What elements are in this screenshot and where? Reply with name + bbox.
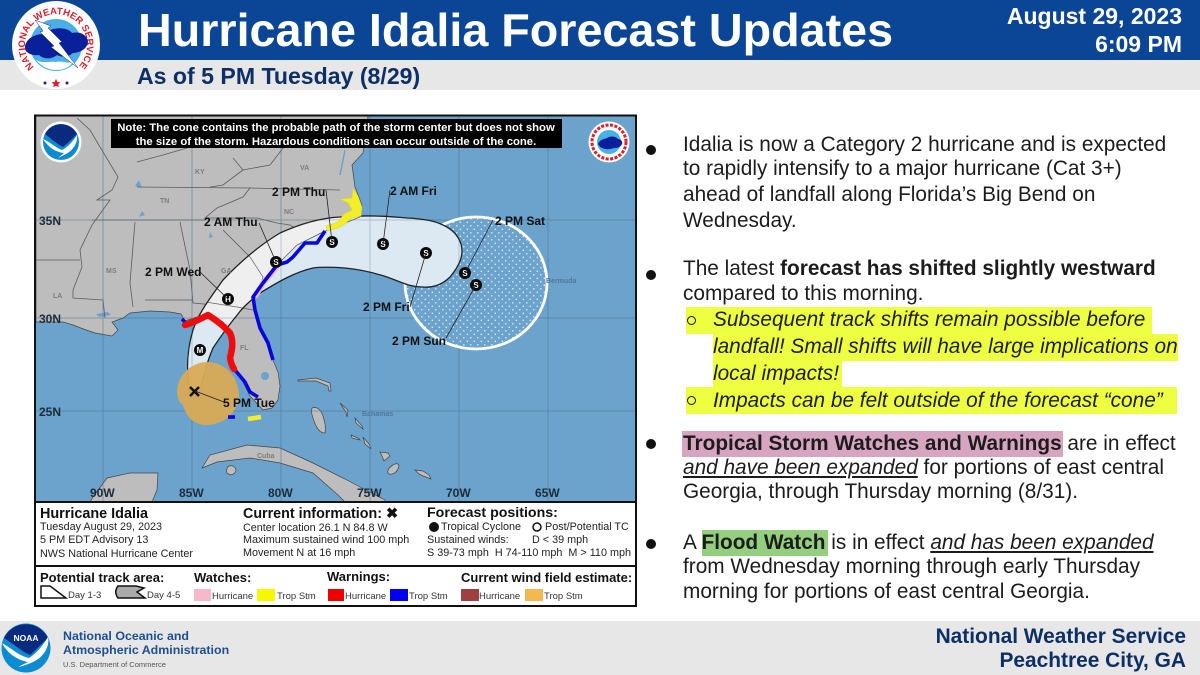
title: Hurricane Idalia Forecast Updates <box>138 4 893 56</box>
tropical storm warning coasts <box>182 231 325 417</box>
legend panel: Trop Stm <box>277 591 316 602</box>
text block: forecast shift: compared to this morning. <box>683 282 923 305</box>
state and place labels: Cuba <box>257 453 275 460</box>
lat lon labels: 85W <box>179 486 204 500</box>
time labels: 2 PM Wed <box>145 265 201 279</box>
cone note: the size of the storm. Hazardous conditions can occur outside of the cone. <box>136 136 536 148</box>
lat lon labels: 35N <box>39 214 61 228</box>
state and place labels: Bermuda <box>546 278 576 285</box>
legend panel: Center location 26.1 N 84.8 W <box>243 522 388 534</box>
legend panel: Hurricane <box>212 591 253 602</box>
lakes <box>96 180 269 380</box>
legend panel: Tuesday August 29, 2023 <box>40 521 162 533</box>
legend panel: S 39-73 mph H 74-110 mph M > 110 mph <box>427 547 631 559</box>
icon: small NOAA logo <box>40 122 82 162</box>
state and place labels: LA <box>53 293 62 300</box>
time labels <box>145 184 545 410</box>
legend panel: Movement N at 16 mph <box>243 547 355 559</box>
date and time: 6:09 PM <box>1095 31 1182 57</box>
leader lines <box>195 190 493 402</box>
icon: NWS logo: NATIONAL WEATHER SERVICE <box>18 8 94 71</box>
lat lon labels <box>39 214 560 500</box>
legend panel: Maximum sustained wind 100 mph <box>243 534 409 546</box>
track points: S <box>380 240 386 249</box>
track points: S <box>462 269 468 278</box>
text block: category and intensification: Idalia is now a Category 2 hurricane and is expected <box>683 133 1166 156</box>
text block: flood watch <box>646 530 1154 603</box>
time labels: 5 PM Tue <box>223 396 275 410</box>
legend panel: Potential track area: <box>40 570 164 585</box>
lat lon grid <box>36 116 635 502</box>
track points: S <box>423 249 429 258</box>
state borders <box>36 118 340 318</box>
track points: S <box>273 258 279 267</box>
current position marker <box>190 387 199 396</box>
time labels: 2 AM Thu <box>204 215 258 229</box>
footer: office name <box>936 625 1186 672</box>
text block: forecast shift <box>646 257 1178 414</box>
icon: NOAA logo <box>2 624 50 672</box>
track points <box>194 236 482 356</box>
footer: NOAA name: National Oceanic and <box>63 629 189 643</box>
state and place labels: TN <box>160 198 169 205</box>
track points: H <box>225 295 231 304</box>
state and place labels: NC <box>284 209 294 216</box>
cone note <box>111 119 562 148</box>
footer: NOAA name: Atmospheric Administration <box>63 643 229 657</box>
state and place labels: FL <box>240 345 249 352</box>
footer: NOAA name: U.S. Department of Commerce <box>63 660 166 669</box>
time labels: 2 PM Sat <box>495 214 545 228</box>
state and place labels: VA <box>300 165 309 172</box>
yellow tropical storm watch NC <box>326 188 362 231</box>
panel: forecast cone map <box>34 114 637 607</box>
text block: category and intensification: to rapidly intensify to a major hurricane (Cat 3+) <box>683 157 1122 180</box>
potential track area day 1-3 <box>186 215 463 392</box>
state and place labels: KY <box>195 169 205 176</box>
time labels: 2 AM Fri <box>390 184 437 198</box>
date and time <box>1007 3 1182 57</box>
legend panel: Warnings: <box>327 569 390 584</box>
lat lon labels: 75W <box>357 486 382 500</box>
legend panel: Trop Stm <box>544 591 583 602</box>
legend panel: Day 1-3 <box>68 590 101 601</box>
text block: forecast shift: landfall! Small shifts will have large implications on <box>713 335 1178 358</box>
legend panel: Sustained winds: <box>427 534 509 546</box>
legend panel: 5 PM EDT Advisory 13 <box>40 534 148 546</box>
text block: category and intensification: ahead of landfall along Florida’s Big Bend on <box>683 183 1095 206</box>
track points: M <box>197 346 204 355</box>
text block: tropical storm watches: and have been expanded for portions of east central <box>683 456 1164 479</box>
text block: flood watch: A Flood Watch is in effect and has been expanded <box>683 531 1154 554</box>
icon: NOAA logo: NOAA <box>13 633 39 643</box>
subtitle: As of 5 PM Tuesday (8/29) <box>137 63 420 89</box>
text block: category and intensification <box>646 133 1166 232</box>
Bahamas islands <box>227 378 431 479</box>
footer band <box>0 621 1200 675</box>
lat lon labels: 30N <box>39 312 61 326</box>
text block: forecast shift: local impacts! <box>713 362 839 385</box>
legend panel: Hurricane Idalia <box>40 506 149 522</box>
text block: flood watch: morning for portions of east central Georgia. <box>683 580 1090 603</box>
text block: forecast shift: Subsequent track shifts remain possible before <box>713 308 1145 331</box>
tropical storm wind field <box>177 362 239 425</box>
Cuba <box>202 445 385 502</box>
header band <box>0 0 1200 60</box>
potential track area day 4-5 <box>405 217 547 349</box>
time labels: 2 PM Thu <box>272 185 325 199</box>
lat lon labels: 25N <box>39 405 61 419</box>
legend panel: Current information: ✖ <box>243 506 398 522</box>
text block: tropical storm watches <box>646 431 1176 503</box>
lat lon labels: 70W <box>446 486 471 500</box>
chesapeake <box>340 150 345 175</box>
legend panel: NWS National Hurricane Center <box>40 548 193 560</box>
text block: flood watch: from Wednesday morning through early Thursday <box>683 555 1140 578</box>
state and place labels: MS <box>106 268 117 275</box>
US landmass <box>36 116 368 410</box>
legend panel: Post/Potential TC <box>545 521 629 533</box>
text block: category and intensification: Wednesday. <box>683 209 797 232</box>
footer: NOAA name <box>63 629 229 669</box>
legend panel: Trop Stm <box>409 591 448 602</box>
state and place labels <box>53 165 576 460</box>
legend panel: Watches: <box>194 570 251 585</box>
hurricane warning coast <box>185 315 234 369</box>
lat lon labels: 90W <box>90 486 115 500</box>
time labels: 2 PM Sun <box>392 334 446 348</box>
legend panel: Current wind field estimate: <box>461 570 632 585</box>
icon: small NWS logo <box>588 122 630 162</box>
legend panel: Tropical Cyclone <box>441 521 521 533</box>
Yucatan <box>90 473 158 502</box>
date and time: August 29, 2023 <box>1007 3 1182 29</box>
time labels: 2 PM Fri <box>363 300 410 314</box>
legend panel: Forecast positions: <box>427 505 558 521</box>
hurricane watch pink edge <box>255 267 277 297</box>
cone note: Note: The cone contains the probable path of the storm center but does not show <box>117 122 555 134</box>
tropical storm watch keys <box>248 417 261 419</box>
text block: forecast shift: The latest forecast has shifted slightly westward <box>683 257 1156 280</box>
legend panel: D < 39 mph <box>532 534 588 546</box>
lat lon labels: 80W <box>268 486 293 500</box>
subtitle band <box>0 60 1200 90</box>
icon: NWS logo <box>12 1 100 89</box>
legend panel: Hurricane <box>345 591 386 602</box>
footer: office name: National Weather Service <box>936 625 1186 648</box>
state and place labels: GA <box>221 268 232 275</box>
text block: forecast shift: Impacts can be felt outside of the forecast “cone” <box>713 389 1163 412</box>
footer: office name: Peachtree City, GA <box>999 649 1186 672</box>
state and place labels: Bahamas <box>362 411 393 418</box>
lat lon labels: 65W <box>535 486 560 500</box>
text block: tropical storm watches: Georgia, through Thursday morning (8/31). <box>683 480 1078 503</box>
text block: tropical storm watches: Tropical Storm Watches and Warnings are in effect <box>683 432 1176 455</box>
track points: S <box>473 281 479 290</box>
legend panel <box>36 502 635 606</box>
legend panel: Day 4-5 <box>147 590 180 601</box>
track points: S <box>329 238 335 247</box>
legend panel: Hurricane <box>479 591 520 602</box>
